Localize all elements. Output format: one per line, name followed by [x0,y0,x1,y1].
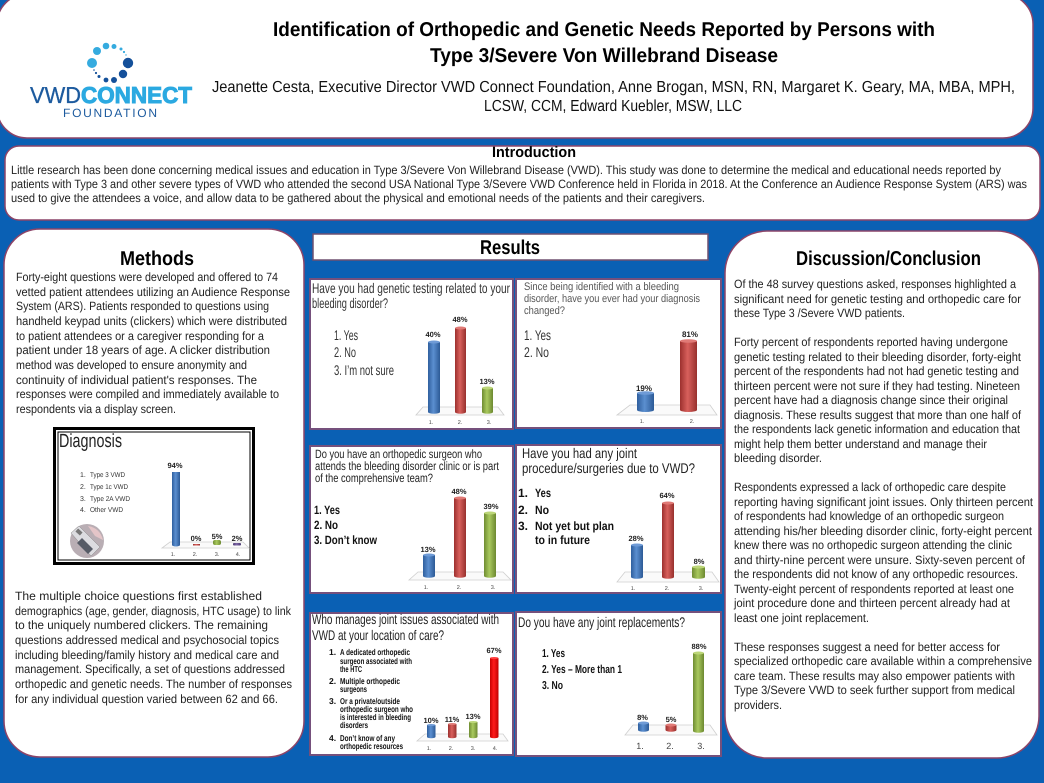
methods text: second paragraph: questions addressed medical and psychosocial topics [15,633,279,647]
chart: joint replacements: 2. [666,741,674,751]
title [273,19,935,67]
chart: joint procedures: Yes [535,486,551,500]
chart: genetic testing: 3. I’m not sure [334,362,394,378]
discussion text: Respondents expressed a lack of orthopedic care despite [734,480,1006,494]
discussion text: knew there was no orthopedic surgeon attending the clinic [734,538,1012,552]
discussion text: attending his/her bleeding disorder clinic, forty-eight percent [734,524,1033,538]
chart: joint procedures: to in future [535,533,590,547]
discussion text: Type 3/Severe VWD to seek further support from medical [734,683,1015,697]
chart: joint procedures [516,445,721,593]
chart: orthopedic surgeon: 1. [424,585,429,591]
discussion text: significant need for genetic testing and orthopedic care for [734,292,1021,306]
chart: diagnosis changed: 1. [640,419,645,425]
discussion text: Forty percent of respondents reported having undergone [734,335,1008,349]
chart: orthopedic surgeon: 13% [420,545,436,554]
chart: genetic testing: 40% [425,330,441,339]
discussion text: these Type 3 /Severe VWD patients. [734,306,905,320]
chart: who manages joint issues: 67% [486,646,502,655]
chart: joint procedures: 2. [518,503,528,517]
chart: joint procedures: 1. [631,586,636,592]
chart: orthopedic surgeon: Do you have an orthopedic surgeon who [315,447,482,461]
chart: joint procedures: 3. [699,586,704,592]
chart: who manages joint issues: 2. [329,676,336,686]
heading: methods: Methods [120,248,194,270]
chart: who manages joint issues: 11% [445,715,460,724]
title: Identification of Orthopedic and Genetic Needs Reported by Persons with [273,19,935,41]
chart: joint procedures: 1. [518,486,528,500]
chart: joint replacements: 8% [637,713,648,722]
chart: who manages joint issues: disorders [340,720,368,730]
chart: diagnosis changed: changed? [524,305,565,317]
methods text: first paragraph: responses were compiled and immediately available to [16,387,279,401]
authors [212,79,1015,115]
chart: genetic testing: 1. Yes [334,327,358,343]
chart: diagnosis changed [516,279,721,428]
chart: diagnosis: 3. [215,552,220,558]
discussion text: These responses suggest a need for better access for [734,640,1000,654]
chart: who manages joint issues: VWD at your location of care? [312,627,444,643]
chart: joint procedures: procedure/surgeries due to VWD? [522,460,695,476]
chart: who manages joint issues: Multiple orthopedic [340,676,400,686]
chart: joint replacements: Do you have any joint replacements? [518,614,685,630]
discussion text: Twenty-eight percent of respondents reported at least one [734,582,1014,596]
chart: diagnosis: 5% [212,532,223,541]
chart: joint procedures: Not yet but plan [535,519,614,533]
chart: who manages joint issues: 10% [423,716,439,725]
chart: diagnosis: 0% [191,534,202,543]
chart: diagnosis [54,428,254,564]
chart: joint procedures: 3. [518,519,528,533]
discussion text: of respondents had knowledge of an orthopedic surgeon [734,509,1004,523]
methods text: second paragraph [15,589,292,706]
chart: diagnosis changed: 1. Yes [524,327,551,343]
chart: who manages joint issues: 13% [465,712,481,721]
methods text: first paragraph: handheld keypad units (clickers) which were distributed [16,314,287,328]
methods text: first paragraph [16,270,290,416]
chart: diagnosis: Type 3 VWD [90,472,125,479]
chart: diagnosis changed: 2. No [524,344,549,360]
chart: who manages joint issues: 3. [471,746,476,752]
chart: who manages joint issues: the HTC [340,664,362,674]
chart: joint replacements: 2. Yes – More than 1 [542,664,622,676]
methods text: first paragraph: vetted patient attendees utilizing an Audience Response [16,285,290,299]
chart: who manages joint issues: 4. [329,733,336,743]
discussion text: joint procedure done and thirteen percent already had at [733,596,1011,610]
discussion text: bleeding disorder. [734,451,822,465]
chart: diagnosis: Other VWD [90,506,123,514]
chart: joint replacements: 3. [697,741,705,751]
chart: who manages joint issues: orthopedic resources [340,741,403,751]
panel: introduction [5,144,1040,220]
chart: joint replacements: 1. [636,741,644,751]
chart: joint replacements: 88% [691,642,707,651]
discussion text: providers. [734,698,782,712]
chart: diagnosis: Type 1c VWD [90,484,128,491]
methods text: first paragraph: continuity of individual patient's responses. The [16,373,257,387]
chart: who manages joint issues: 1. [427,746,432,752]
methods text: second paragraph: The multiple choice questions first established [15,589,262,603]
methods text: second paragraph: including bleeding/family history and medical care and [15,648,279,662]
chart: joint procedures: 2. [665,586,670,592]
chart: joint procedures: 64% [659,491,675,500]
chart: genetic testing: 2. [458,420,463,426]
chart: joint procedures: No [535,503,549,517]
chart: genetic testing: 2. No [334,344,356,360]
chart: genetic testing: 3. [487,420,492,426]
chart: orthopedic surgeon: 2. [457,585,462,591]
logo: VWD Connect Foundation [30,43,192,120]
chart: who manages joint issues [310,611,513,755]
chart: genetic testing: 1. [429,420,434,426]
methods text: first paragraph: method was developed to ensure anonymity and [16,358,247,372]
chart: diagnosis changed: Since being identified with a bleeding [524,281,679,293]
title: Type 3/Severe Von Willebrand Disease [430,45,778,67]
methods text: second paragraph: to the uniquely numbered clickers. The remaining [15,618,268,632]
chart: diagnosis: 1. [171,552,176,558]
chart: who manages joint issues: surgeons [340,684,367,694]
introduction text [11,163,1027,205]
chart: diagnosis changed: 2. [690,419,695,425]
heading: results [313,234,708,260]
chart: diagnosis changed: 19% [636,384,652,393]
chart: orthopedic surgeon: of the comprehensive team? [315,471,433,485]
chart: who manages joint issues: 4. [493,746,498,752]
chart: diagnosis changed: 81% [682,330,698,339]
chart: diagnosis: 1. [80,472,86,479]
chart: joint replacements: 3. No [542,680,563,692]
chart: diagnosis: 2. [193,552,198,558]
chart: who manages joint issues: Or a private/outside [340,696,400,706]
methods text: second paragraph: management. Specifically, a set of questions addressed [15,662,285,676]
chart: genetic testing [310,279,513,429]
discussion text: thirteen percent were not sure if they had testing. Nineteen [734,379,1020,393]
chart: orthopedic surgeon [310,446,513,593]
discussion text: genetic testing related to their bleeding disorder, forty-eight [734,350,1022,364]
chart: diagnosis changed: disorder, have you ever had your diagnosis [524,293,700,305]
panel: methods [4,229,304,757]
methods text: first paragraph: patient under 18 years of age. A clicker distribution [16,343,270,357]
chart: who manages joint issues: Don’t know of any [340,733,395,743]
methods text: second paragraph: orthopedic and genetic needs. The number of responses [15,677,292,691]
chart: orthopedic surgeon: attends the bleeding disorder clinic or is part [315,459,500,473]
chart: who manages joint issues: Who manages joint issues associated with [312,611,499,627]
introduction text: used to give the attendees a voice, and allow data to be gathered about the physical and emotional needs of the patients and their caregivers. [11,191,705,205]
chart: diagnosis: 4. [236,552,241,558]
chart: orthopedic surgeon: 3. [491,585,496,591]
heading: introduction: Introduction [492,144,576,161]
chart: who manages joint issues: surgeon associated with [340,656,412,666]
chart: joint procedures: 8% [694,557,705,566]
panel: discussion and conclusion [725,231,1039,758]
chart: diagnosis: Type 2A VWD [90,496,130,503]
chart: who manages joint issues: 1. [329,647,336,657]
chart: diagnosis: 3. [80,496,86,503]
chart: orthopedic surgeon: 1. Yes [314,503,340,517]
discussion text: the respondents lack genetic information and education that [734,422,1021,436]
discussion text: Of the 48 survey questions asked, responses highlighted a [734,277,1016,291]
chart: joint replacements [516,612,721,756]
panel: header [0,0,1033,138]
discussion text: care team. These results may also empower patients with [734,669,1015,683]
methods text: first paragraph: System (ARS). Patients responded to questions using [16,299,269,313]
logo: VWD Connect Foundation: VWD [30,82,81,108]
chart: diagnosis: Diagnosis [59,431,122,452]
chart: genetic testing: bleeding disorder? [312,295,388,311]
chart: who manages joint issues: orthopedic surgeon who [340,704,413,714]
methods text: first paragraph: to patient attendees or a caregiver responding for a [16,329,264,343]
chart: orthopedic surgeon: 39% [483,502,499,511]
authors: LCSW, CCM, Edward Kuebler, MSW, LLC [484,98,742,115]
chart: genetic testing: 13% [479,377,495,386]
chart: who manages joint issues: 2. [449,746,454,752]
discussion text: percent have had a diagnosis change since their original [734,393,1008,407]
chart: orthopedic surgeon: 3. Don’t know [314,533,378,547]
methods text: second paragraph: for any individual question varied between 62 and 66. [15,692,278,706]
methods text: second paragraph: demographics (age, gender, diagnosis, HTC usage) to link [15,604,292,618]
chart: genetic testing: 48% [452,315,468,324]
discussion text: diagnosis. These results suggest that more than one half of [734,408,1022,422]
heading: results: Results [480,237,540,259]
logo: VWD Connect Foundation: FOUNDATION [63,106,157,120]
chart: diagnosis: 94% [167,461,183,470]
chart: who manages joint issues: A dedicated orthopedic [340,647,410,657]
chart: diagnosis: 2% [232,534,243,543]
logo: VWD Connect Foundation: CONNECT [81,82,192,108]
chart: joint procedures: Have you had any joint [522,445,637,461]
methods text: first paragraph: respondents via a display screen. [16,402,176,416]
chart: joint replacements: 5% [666,715,677,724]
chart: genetic testing: Have you had genetic testing related to your [312,280,510,296]
chart: joint replacements: 1. Yes [542,648,565,660]
chart: orthopedic surgeon: 48% [451,487,467,496]
chart: diagnosis: 4. [80,507,86,514]
discussion text [733,277,1034,712]
chart: diagnosis: 2. [80,484,86,491]
heading: discussion/conclusion: Discussion/Conclusion [796,248,981,270]
discussion text: might help them better understand and manage their [734,437,987,451]
chart: joint procedures: 28% [628,534,644,543]
methods text: first paragraph: Forty-eight questions were developed and offered to 74 [16,270,278,284]
chart: who manages joint issues: 3. [329,696,336,706]
discussion text: percent of the respondents had not had genetic testing and [734,364,1019,378]
discussion text: least one joint replacement. [734,611,869,625]
chart: orthopedic surgeon: 2. No [314,518,338,532]
discussion text: and thirty-nine percent were unsure. Sixty-seven percent of [734,553,1026,567]
discussion text: the respondents did not know of any orthopedic resources. [734,567,1018,581]
chart: who manages joint issues: is interested in bleeding [340,712,411,722]
